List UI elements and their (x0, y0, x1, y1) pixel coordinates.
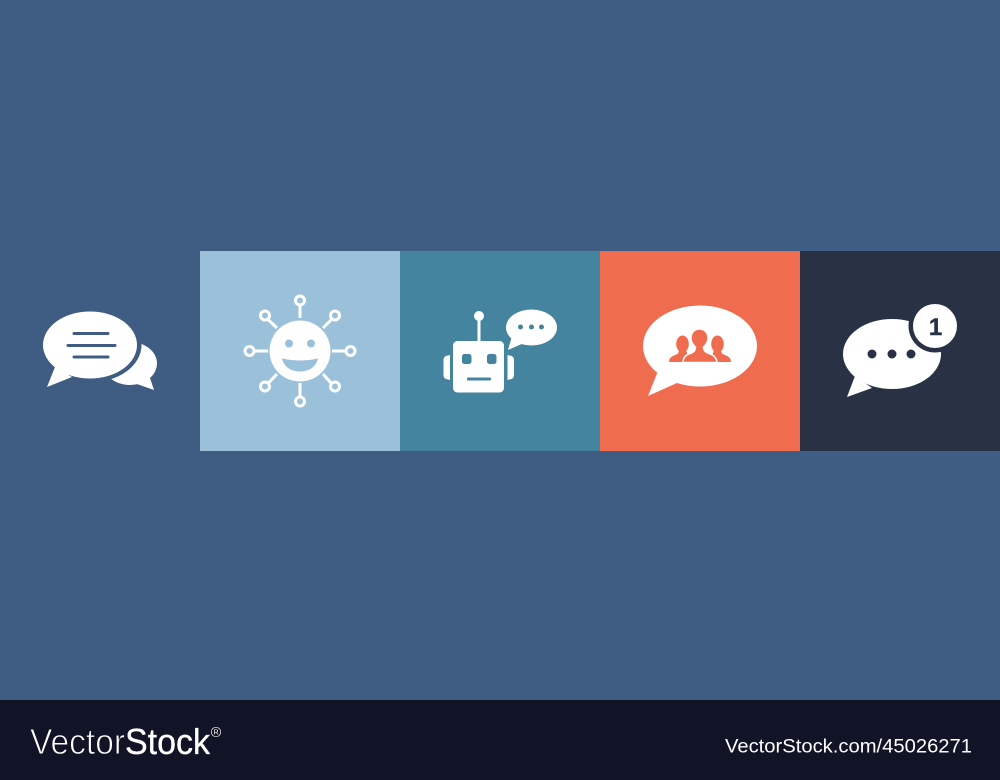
icon: speech bubble with notification badge (843, 300, 962, 397)
panel: smiling network face (200, 251, 400, 451)
panel: notification (800, 251, 1000, 451)
panel: group chat (600, 251, 800, 451)
panel: chatbot (400, 251, 600, 451)
badge number: 1 (929, 314, 942, 341)
logo: VectorStock: Stock (125, 721, 211, 762)
logo: VectorStock: Vector (30, 721, 125, 762)
logo: VectorStock (30, 721, 221, 762)
image id: VectorStock.com/45026271 (725, 736, 972, 758)
icon: speech bubbles with text lines (38, 308, 157, 390)
logo: VectorStock: R (213, 730, 219, 736)
icon: speech bubble with people (643, 306, 757, 396)
icon: robot with speech bubble (444, 310, 557, 392)
icon: smiley with connected nodes (245, 296, 355, 406)
footer bar (0, 700, 1000, 780)
